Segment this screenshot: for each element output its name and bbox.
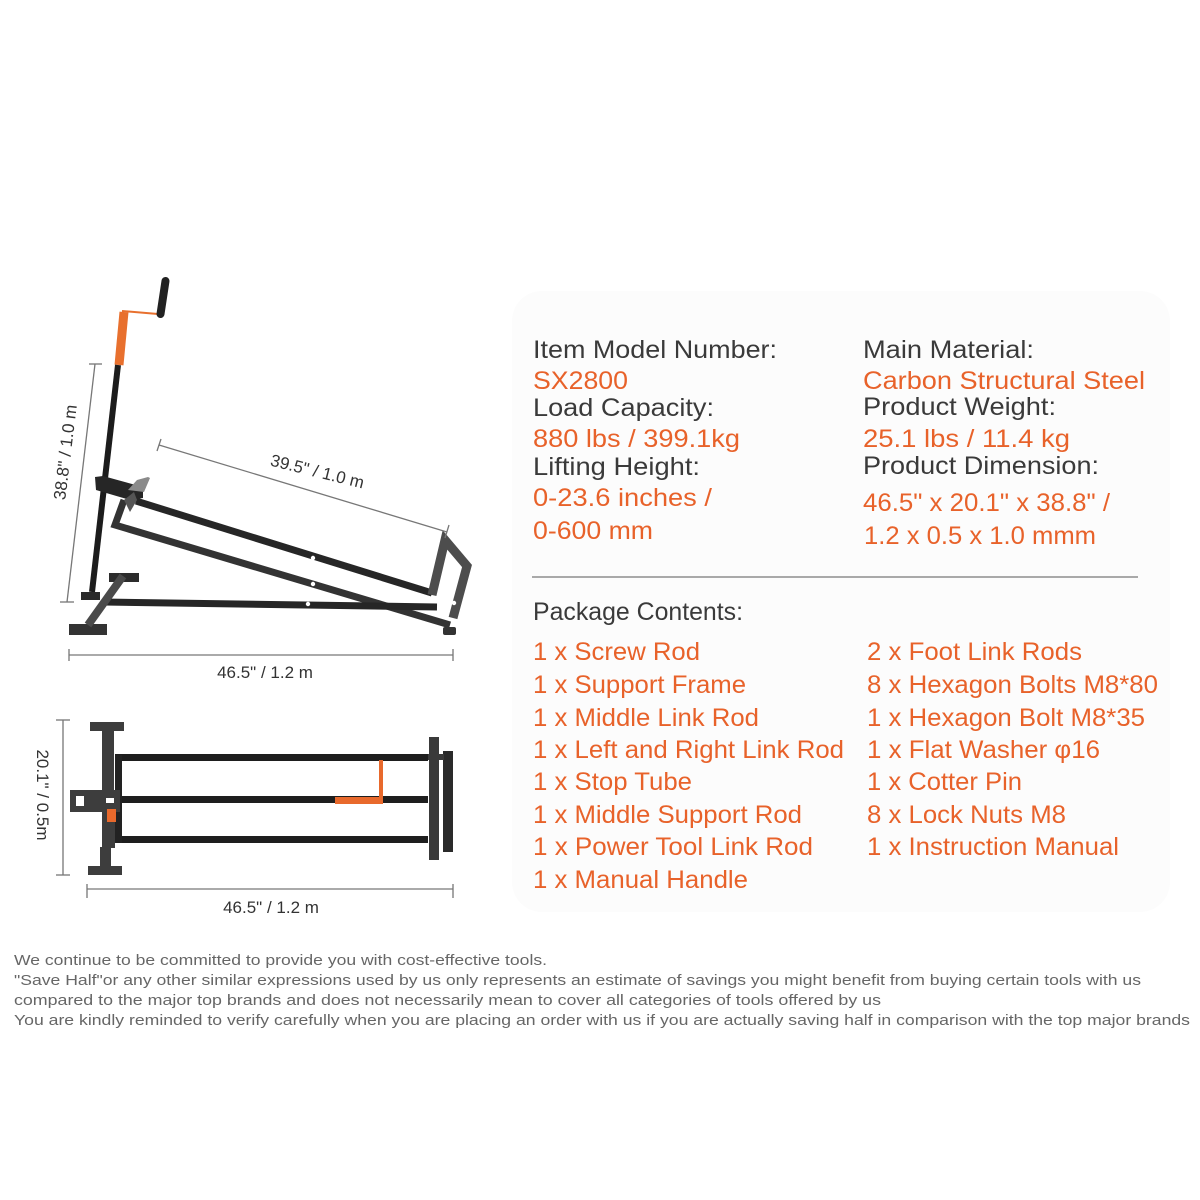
package contents: right list: 1 x Cotter Pin bbox=[867, 768, 1022, 796]
specifications: right column: Carbon Structural Steel bbox=[863, 367, 1145, 395]
package contents: left list: 1 x Left and Right Link Rod bbox=[533, 736, 844, 764]
dimension: side length: 46.5" / 1.2 m bbox=[217, 663, 313, 682]
package contents: right list: 1 x Instruction Manual bbox=[867, 833, 1119, 861]
lower beam bbox=[115, 500, 450, 625]
specifications: left column: 0-600 mm bbox=[533, 517, 653, 545]
footnote disclaimer: We continue to be committed to provide you with cost-effective tools. bbox=[14, 952, 547, 969]
package contents: left list: 1 x Middle Link Rod bbox=[533, 704, 759, 732]
package contents: left list: 1 x Support Frame bbox=[533, 671, 746, 699]
dimension: height bbox=[50, 364, 102, 602]
specifications: left column: 0-23.6 inches / bbox=[533, 484, 712, 512]
package contents: right list: 2 x Foot Link Rods bbox=[867, 638, 1082, 666]
dimension: ramp length bbox=[157, 439, 449, 538]
rails bbox=[115, 754, 428, 843]
specifications: left column: Load Capacity: bbox=[533, 394, 714, 422]
lift bracket bbox=[95, 476, 150, 512]
package contents: left list bbox=[533, 638, 844, 894]
specifications: right column: Main Material: bbox=[863, 336, 1034, 364]
specifications: right column: 1.2 x 0.5 x 1.0 mmm bbox=[864, 522, 1096, 550]
specifications: left column: Item Model Number: bbox=[533, 336, 777, 364]
package contents: right list: 8 x Hexagon Bolts M8*80 bbox=[867, 671, 1158, 699]
package contents: left list: 1 x Power Tool Link Rod bbox=[533, 833, 813, 861]
icon: crank handle bbox=[92, 281, 166, 592]
specifications: left column: SX2800 bbox=[533, 367, 628, 395]
specifications: left column bbox=[533, 336, 777, 545]
panel: specifications background bbox=[512, 291, 1170, 912]
specifications: left column: Lifting Height: bbox=[533, 453, 700, 481]
package contents: left list: 1 x Stop Tube bbox=[533, 768, 692, 796]
top beam bbox=[136, 501, 432, 593]
package contents: left list: 1 x Middle Support Rod bbox=[533, 801, 802, 829]
specifications: right column: Product Dimension: bbox=[863, 452, 1099, 480]
mounting holes bbox=[306, 556, 456, 606]
left frame and feet bbox=[70, 722, 124, 875]
heading: package contents: Package Contents: bbox=[533, 598, 743, 626]
feet bbox=[69, 573, 456, 635]
dimension: ramp length: 39.5" / 1.0 m bbox=[269, 451, 366, 492]
package contents: left list: 1 x Manual Handle bbox=[533, 866, 748, 894]
dimension: top length: 46.5" / 1.2 m bbox=[223, 898, 319, 917]
end frame bbox=[432, 540, 467, 618]
specifications: right column: 25.1 lbs / 11.4 kg bbox=[863, 425, 1070, 453]
dimension: height: 38.8" / 1.0 m bbox=[50, 404, 81, 501]
base bar bbox=[103, 602, 437, 607]
footnote disclaimer: compared to the major top brands and does not necessarily mean to cover all categories of tools offered by us bbox=[14, 992, 881, 1009]
specifications: right column bbox=[863, 336, 1145, 550]
footnote disclaimer bbox=[14, 952, 1190, 1029]
side view of lift bbox=[69, 281, 467, 635]
footnote disclaimer: "Save Half"or any other similar expressions used by us only represents an estimate of savings you might benefit from buying certain tools with us bbox=[14, 972, 1141, 989]
footnote disclaimer: You are kindly reminded to verify carefully when you are placing an order with us if you are actually saving half in comparison with the top major brands bbox=[14, 1012, 1190, 1029]
package contents: left list: 1 x Screw Rod bbox=[533, 638, 700, 666]
orange crank bbox=[107, 760, 383, 822]
package contents: right list: 1 x Hexagon Bolt M8*35 bbox=[867, 704, 1145, 732]
specifications: right column: Product Weight: bbox=[863, 393, 1056, 421]
right end frame bbox=[428, 737, 453, 860]
package contents: right list bbox=[867, 638, 1158, 861]
package contents: right list: 8 x Lock Nuts M8 bbox=[867, 801, 1066, 829]
specifications: left column: 880 lbs / 399.1kg bbox=[533, 425, 740, 453]
dimension: width: 20.1" / 0.5m bbox=[33, 749, 52, 841]
top view of lift bbox=[70, 722, 453, 875]
package contents: right list: 1 x Flat Washer φ16 bbox=[867, 736, 1100, 764]
specifications: right column: 46.5" x 20.1" x 38.8" / bbox=[863, 489, 1110, 517]
